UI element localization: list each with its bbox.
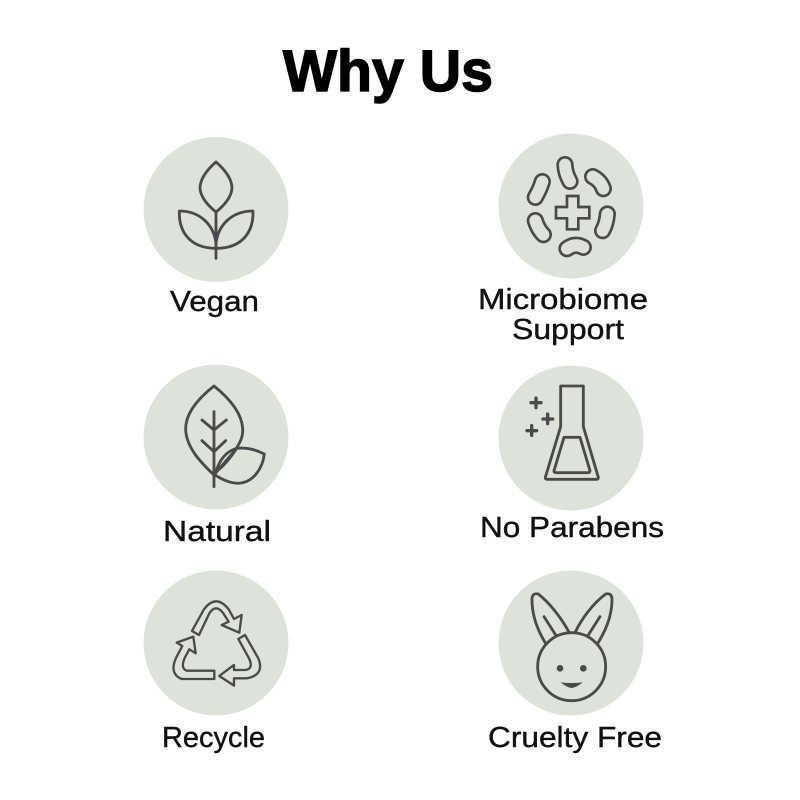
label: natural: Natural bbox=[163, 516, 271, 548]
label: vegan: Vegan bbox=[170, 286, 259, 318]
label: cruelty free: Cruelty Free bbox=[488, 722, 662, 754]
icon: sprout bbox=[179, 162, 253, 258]
label: recycle: Recycle bbox=[162, 722, 265, 754]
icon: recycling arrows bbox=[173, 601, 260, 686]
label: microbiome support: Microbiome bbox=[478, 284, 648, 316]
panel: natural bbox=[144, 364, 288, 548]
icon: leaves bbox=[186, 386, 264, 487]
panel: vegan bbox=[144, 137, 288, 318]
panel: microbiome support bbox=[478, 134, 648, 346]
circle: no parabens background bbox=[498, 366, 644, 510]
circle: cruelty free background bbox=[498, 570, 644, 716]
icon: bacteria and plus bbox=[535, 165, 607, 249]
circle: microbiome background bbox=[498, 134, 644, 278]
icon: flask bbox=[527, 386, 598, 479]
label: microbiome support bbox=[478, 284, 648, 346]
icon: rabbit bbox=[532, 594, 612, 701]
circle: vegan background bbox=[144, 137, 288, 282]
circle: natural background bbox=[144, 364, 288, 510]
panel: no parabens bbox=[480, 366, 664, 544]
panel: recycle bbox=[144, 570, 288, 754]
title: Why Us bbox=[283, 39, 493, 104]
circle: recycle background bbox=[144, 570, 288, 716]
label: microbiome support: Support bbox=[512, 314, 624, 346]
label: no parabens: No Parabens bbox=[480, 512, 664, 544]
panel: cruelty free bbox=[488, 570, 662, 754]
